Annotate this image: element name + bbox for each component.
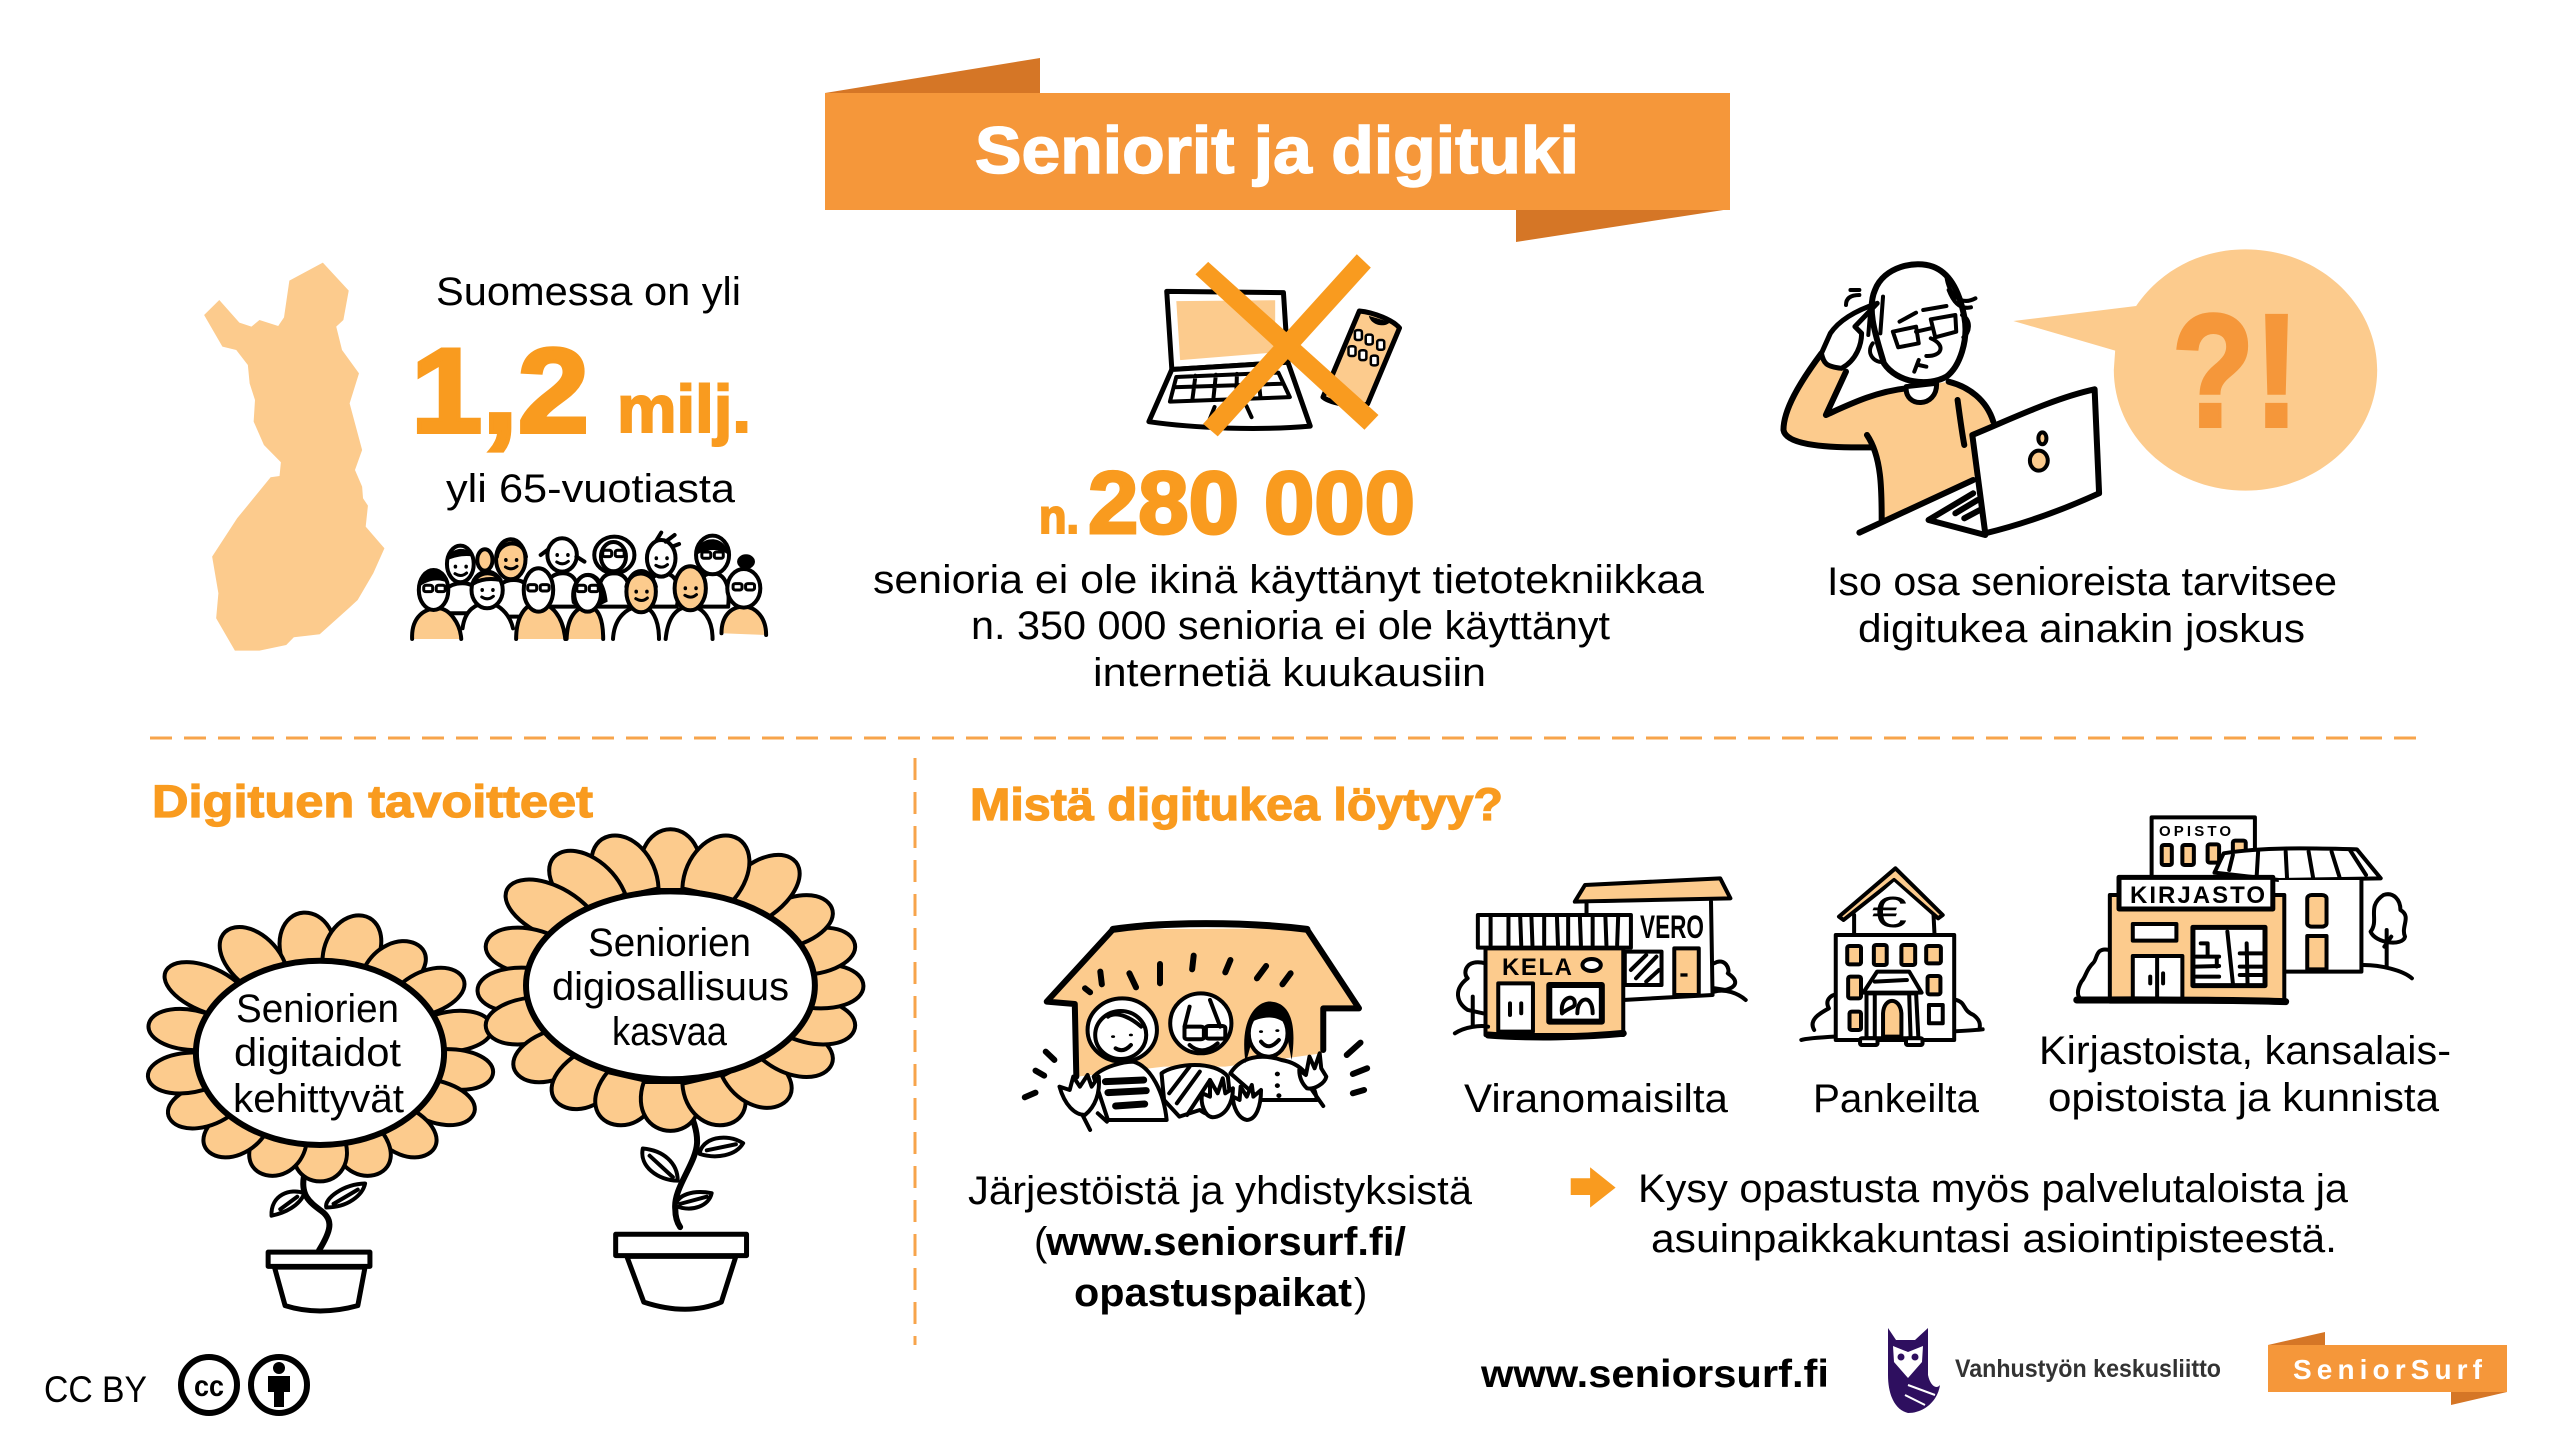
text: million: milj. (617, 372, 751, 447)
icon: crowd of seniors (412, 533, 766, 639)
arrow (1571, 1167, 1616, 1208)
icon: kela and vero buildings (1455, 878, 1746, 1037)
opisto sign: OPISTO (2159, 823, 2231, 840)
text: libraries: opistoista ja kunnista (2048, 1076, 2440, 1120)
text: organisations: ) (1354, 1271, 1367, 1315)
text: description: internetiä kuukausiin (1093, 651, 1486, 695)
text: description: n. 350 000 senioria ei ole käyttänyt (971, 604, 1610, 648)
title banner (825, 58, 1730, 242)
big number: 280 000 (1088, 453, 1415, 552)
icon: owl (1888, 1328, 1940, 1413)
footer: SeniorSurf logo (2268, 1332, 2507, 1405)
text: libraries: Kirjastoista, kansalais- (2039, 1029, 2451, 1073)
text: description: senioria ei ole ikinä käyttänyt tietotekniikkaa (873, 558, 1705, 602)
text: flower 1: digitaidot (234, 1031, 401, 1075)
icon: house with three people (1025, 924, 1367, 1130)
panel: Finland seniors count (204, 263, 766, 651)
text: organisations: www.seniorsurf.fi/ (1045, 1220, 1406, 1264)
text: description (873, 558, 1705, 695)
text: organisation name: Vanhustyön keskusliitto (1955, 1355, 2221, 1383)
vero sign: VERO (1640, 909, 1704, 945)
flower: digital inclusion (477, 829, 863, 1309)
text: flower 2: Seniorien (588, 921, 751, 965)
text: flower 2: digiosallisuus (552, 965, 789, 1009)
heading: Mistä digitukea löytyy? (970, 779, 1503, 830)
icon: creative commons: cc (194, 1370, 224, 1403)
text: organisations: opastuspaikat (1074, 1271, 1352, 1315)
text: n. prefix: n. (1039, 491, 1079, 544)
text: organisations (968, 1169, 1473, 1315)
text: description: digitukea ainakin joskus (1858, 607, 2305, 651)
text: description: Iso osa senioreista tarvitsee (1827, 560, 2337, 604)
footer: website: www.seniorsurf.fi (1480, 1353, 1829, 1396)
footer: Vanhustyön keskusliitto logo (1888, 1328, 2221, 1413)
text: intro: Suomessa on yli (436, 270, 741, 314)
icon: confused man at laptop (1783, 264, 2099, 535)
icon: crossed out laptop and phone (1149, 254, 1400, 436)
heading: Digituen tavoitteet (152, 776, 593, 827)
text: flower 2: kasvaa (612, 1010, 728, 1054)
speech bubble (2013, 249, 2377, 491)
text: exclamation: ?! (2172, 281, 2299, 460)
title: Seniorit ja digituki (975, 113, 1579, 187)
panel: where to find digital support (968, 779, 2451, 1315)
text: flower 1: Seniorien (236, 987, 399, 1031)
icon: attribution (251, 1357, 307, 1413)
text: licence: CC BY (44, 1369, 147, 1410)
text: description (1827, 560, 2337, 651)
text: flower 2 (552, 921, 789, 1054)
kela sign: KELA (1502, 954, 1572, 981)
icon: creative commons (181, 1357, 237, 1413)
kirjasto sign: KIRJASTO (2130, 882, 2265, 909)
text: libraries (2039, 1029, 2451, 1120)
text: authorities: Viranomaisilta (1464, 1077, 1729, 1121)
text: service centres tip (1638, 1167, 2349, 1261)
text: service centres tip: asuinpaikkakuntasi asiointipisteestä. (1651, 1217, 2337, 1261)
icon: map of Finland (204, 263, 384, 651)
text: service centres tip: Kysy opastusta myös palvelutaloista ja (1638, 1167, 2349, 1211)
text: age: yli 65-vuotiasta (446, 467, 736, 511)
flower: digital skills (143, 911, 497, 1311)
euro sign: € (1872, 888, 1907, 937)
text: organisations: ( (1034, 1220, 1048, 1264)
panel: non-users statistic (873, 254, 1705, 695)
panel: goals of digital support (143, 776, 863, 1311)
panel: seniors need support (1783, 249, 2377, 651)
text: flower 1 (233, 987, 404, 1121)
icon: library and college buildings (2077, 817, 2412, 1002)
text: banks: Pankeilta (1813, 1077, 1980, 1121)
footer: licence (44, 1357, 307, 1413)
text: flower 1: kehittyvät (233, 1077, 404, 1121)
text: organisations: Järjestöistä ja yhdistyksistä (968, 1169, 1473, 1213)
icon: bank building (1801, 868, 1983, 1045)
text: logo wordmark: SeniorSurf (2293, 1354, 2483, 1385)
big number: 1,2 (411, 324, 589, 458)
